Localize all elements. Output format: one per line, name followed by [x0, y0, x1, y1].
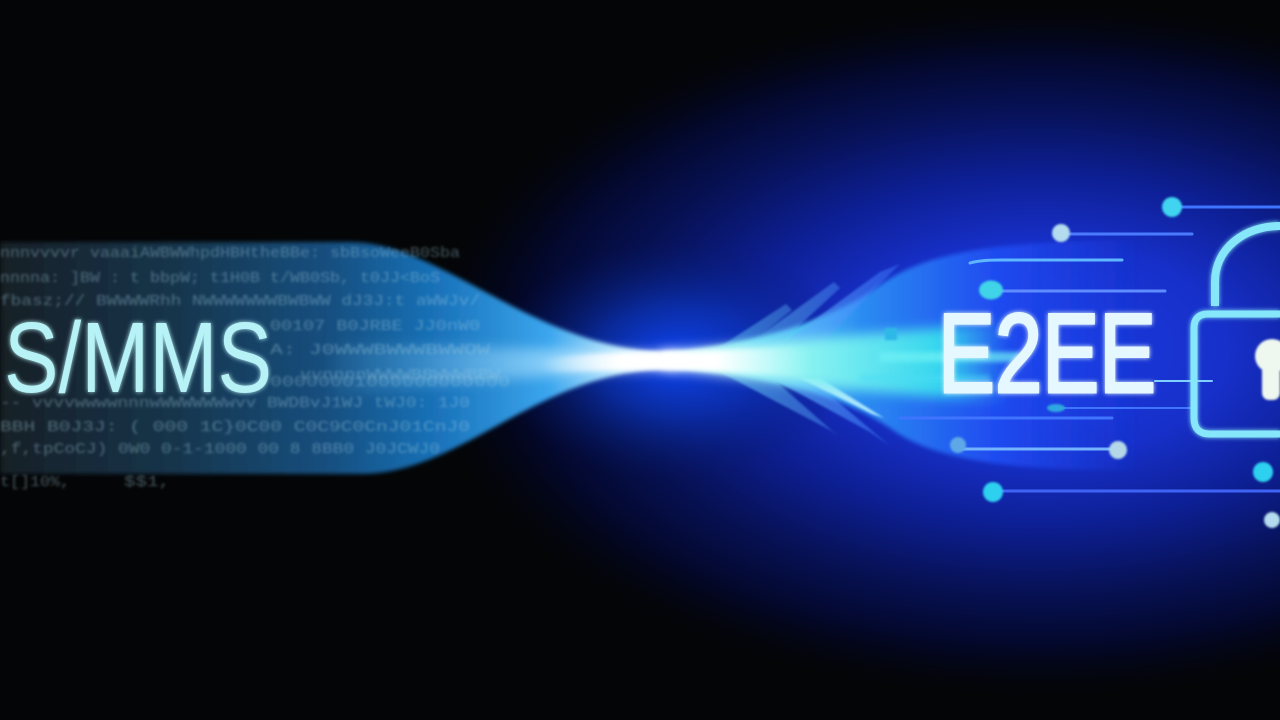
encrypted code text rows — [0, 245, 510, 491]
label: S/MMS: S/MMS — [4, 302, 272, 414]
encrypted code text rows: 00000001000000000000 — [270, 374, 510, 391]
encrypted code text rows: vvnnnnWWWWBBWWWBBW — [300, 367, 500, 384]
left data stream — [0, 242, 680, 491]
light streaks — [715, 264, 900, 446]
right light stream — [660, 240, 1140, 470]
encrypted code text rows: t[]10%, — [0, 474, 70, 491]
encrypted code text rows: $$1, — [124, 474, 170, 491]
encrypted code text rows: A: J0WWWBWWWBWWOW — [270, 342, 490, 359]
encrypted code text rows: -- vvvvwwwwnnnwWWWWWWwvv BWDBvJ1WJ tWJ0: 1J0 — [0, 395, 470, 412]
center light pinch — [530, 346, 810, 378]
label: E2EE: E2EE — [938, 291, 1156, 416]
node dots — [885, 197, 1280, 528]
icon: padlock — [1194, 226, 1280, 434]
encrypted code text rows: 00107 B0JRBE JJ0nW0 — [270, 318, 480, 335]
encrypted code text rows: nnnna: ]BW : t bbpW; t1H0B t/WB0Sb, t0JJ<BoS — [0, 270, 440, 287]
encrypted code text rows: ,f,tpCoCJ) 0W0 0-1-1000 00 8 8BB0 J0JCWJ0 — [0, 441, 440, 458]
circuit lines and nodes — [885, 197, 1280, 528]
encrypted code text rows: BBH B0J3J: ( 000 1C}0C00 C0C9C0CnJ01CnJ0 — [0, 419, 470, 436]
encrypted code text rows: fbasz;// BWWWWRhh NWWWWWWWBWBWW dJ3J:t aWWJv/ — [0, 293, 480, 310]
encrypted code text rows: nnnvvvvr vaaaiAWBWWhpdHBHtheBBe: sbBsoWeeB0Sba — [0, 245, 460, 262]
keyhole — [1255, 339, 1280, 400]
